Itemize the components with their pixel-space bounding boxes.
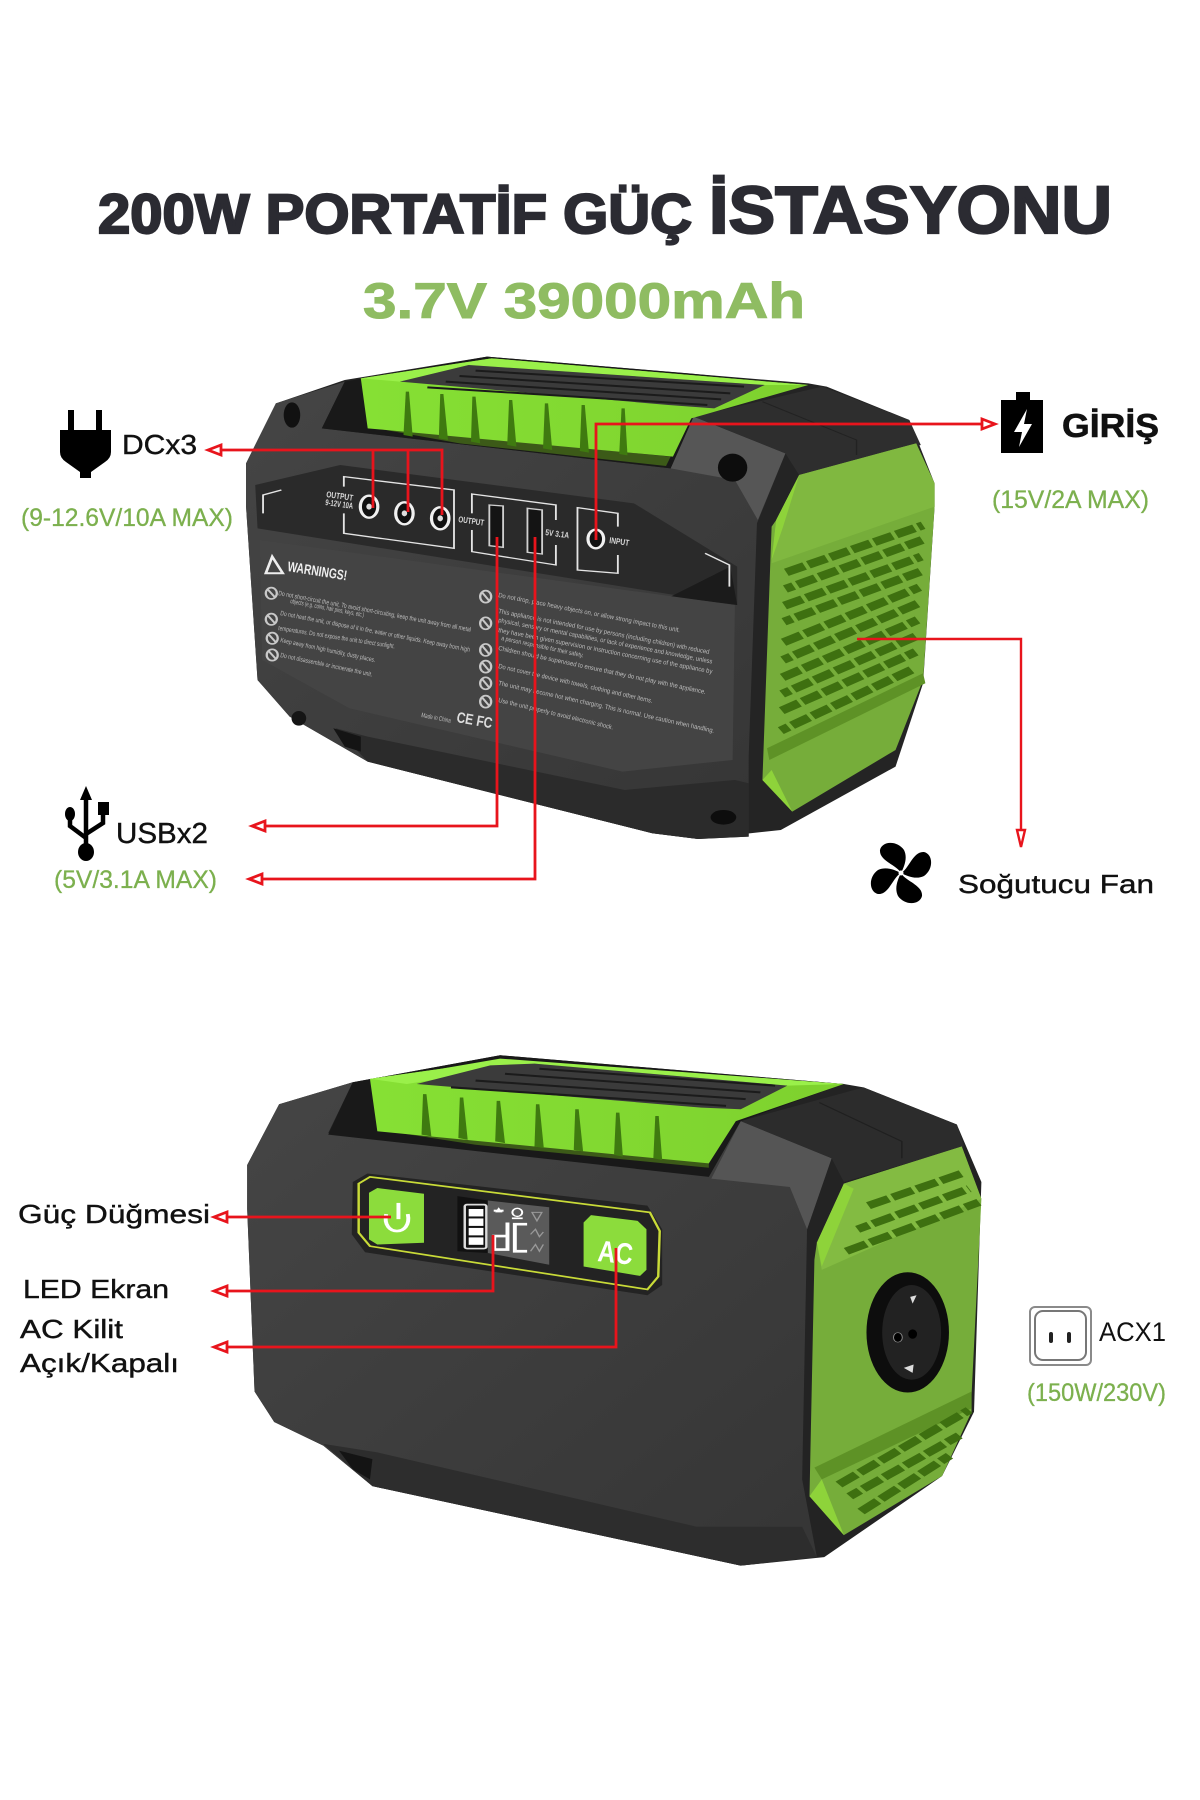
product: power station rear view: Keep away from high humidity, dusty places. xyxy=(280,637,376,664)
product: power station rear view: 5V 3.1A xyxy=(545,527,570,540)
product: power station rear view: INPUT xyxy=(609,535,631,548)
callout: USB outputs: USBx2 xyxy=(116,818,208,850)
callout: AC switch label: Açık/Kapalı xyxy=(20,1348,179,1378)
callout: AC switch label: AC Kilit xyxy=(20,1314,124,1344)
product: power station rear view: a person responsible for their safety. xyxy=(501,635,584,659)
subtitle: capacity: 3.7V 39000mAh xyxy=(363,273,805,329)
callout: DC outputs: (9-12.6V/10A MAX) xyxy=(21,504,233,532)
product: power station rear view: temperatures. Do not expose the unit to direct sunlight. xyxy=(278,625,395,650)
callout: AC switch label xyxy=(20,1314,179,1378)
product: power station rear view: Do not drop, place heavy objects on, or allow strong impact to this unit. xyxy=(498,592,681,634)
icon: AC socket xyxy=(1030,1307,1091,1365)
product: power station rear view: OUTPUT xyxy=(458,514,485,528)
callout: AC output xyxy=(1027,1307,1166,1407)
title: İSTASYONU xyxy=(709,173,1112,248)
product: power station rear view: objects (e.g. coins, hair pins, keys, etc.) xyxy=(290,598,365,619)
product: power station rear view: Do not disassemble or incinerate the unit. xyxy=(280,652,373,679)
product: power station rear view: OUTPUT xyxy=(326,489,354,503)
product: power station rear view: CE FC xyxy=(455,709,494,732)
product: power station rear view: Children should be supervised to ensure that they do not play with the appliance. xyxy=(498,645,707,696)
product: power station rear view: Made in China xyxy=(421,712,452,725)
callout: DC outputs xyxy=(21,410,233,532)
icon: DC plug xyxy=(60,410,111,478)
arrow: USB output lines xyxy=(249,537,535,884)
callout: DC outputs: DCx3 xyxy=(122,429,197,460)
product: power station rear view: 9-12V 10A xyxy=(325,497,354,511)
product: power station rear view xyxy=(246,357,935,839)
callout: LED display label: LED Ekran xyxy=(23,1274,169,1304)
icon: USB trident xyxy=(65,786,109,861)
title: 200W PORTATİF GÜÇ xyxy=(98,182,692,245)
product: power station front view: AC xyxy=(596,1235,635,1272)
product: power station rear view: Use the unit properly to avoid electronic shock. xyxy=(498,697,614,732)
product: power station rear view: Do not heat the unit, or dispose of it in fire, water or other liquids. Keep away from high xyxy=(280,610,471,654)
callout: input: (15V/2A MAX) xyxy=(992,486,1149,514)
callout: input xyxy=(992,392,1159,514)
arrow: input line xyxy=(596,419,995,540)
callout: cooling fan xyxy=(871,843,1154,903)
callout: AC output: ACX1 xyxy=(1099,1317,1166,1347)
product: power station front view xyxy=(247,1055,981,1566)
product: power station rear view: This appliance is not intended for use by persons (including children) with reduced xyxy=(498,608,710,656)
product: power station rear view: they have been given supervision or instruction concerning use of the appliance by xyxy=(498,627,714,676)
icon: fan xyxy=(871,843,931,903)
product: power station rear view: Do not cover the device with towels, clothing and other items. xyxy=(498,663,653,705)
arrow: front panel lines xyxy=(214,1212,616,1352)
callout: cooling fan: Soğutucu Fan xyxy=(958,869,1154,899)
title xyxy=(98,173,1112,248)
product: power station rear view: WARNINGS! xyxy=(287,558,348,583)
arrow: DC output lines xyxy=(208,445,442,515)
icon: battery xyxy=(1001,392,1043,453)
product: power station rear view: The unit may become hot when charging. This is normal. Use caution when handling. xyxy=(498,680,715,735)
product: power station rear view: physical, sensory or mental capabilities, or lack of experience and knowledge, unless xyxy=(498,617,714,666)
callout: AC output: (150W/230V) xyxy=(1027,1379,1166,1407)
callout: power button label: Güç Düğmesi xyxy=(18,1199,210,1229)
callout: USB outputs xyxy=(54,786,217,894)
callout: USB outputs: (5V/3.1A MAX) xyxy=(54,866,217,894)
arrow: fan line xyxy=(857,639,1025,847)
callout: input: GİRİŞ xyxy=(1062,407,1159,444)
product: power station rear view: Do not short-circuit the unit. To avoid short-circuiting, keep the unit away from all metal xyxy=(278,590,472,634)
